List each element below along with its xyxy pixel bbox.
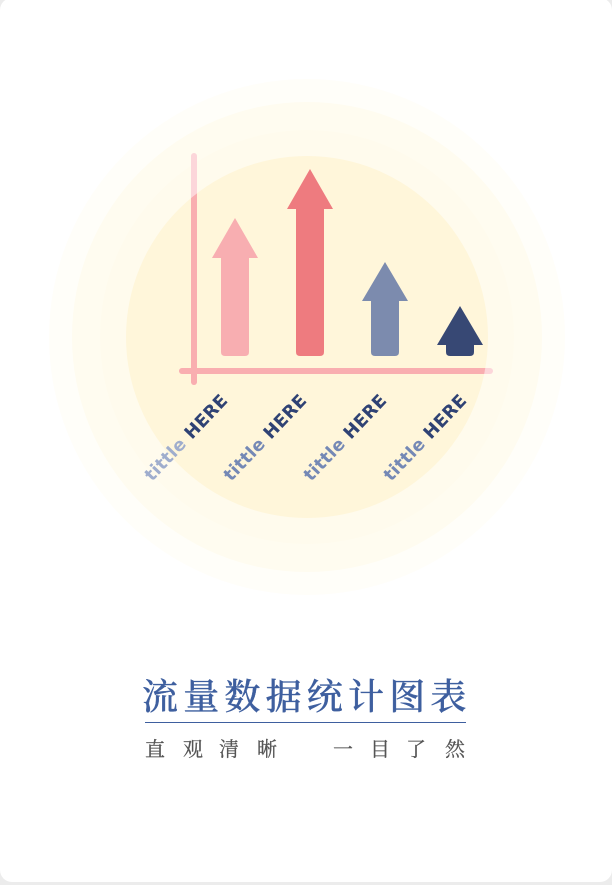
label 2: tittle HERE bbox=[220, 391, 311, 485]
arrow bar 4 bbox=[437, 306, 483, 356]
label 4: tittle HERE bbox=[380, 391, 471, 485]
bar chart bbox=[141, 153, 493, 485]
title underline bbox=[145, 722, 466, 723]
x axis bbox=[179, 368, 493, 374]
subtitle: 直观清晰 bbox=[145, 738, 277, 761]
background glow circles bbox=[49, 79, 565, 595]
main title: 流量数据统计图表 bbox=[142, 677, 472, 717]
label 3: tittle HERE bbox=[300, 391, 391, 485]
arrow bar 1 bbox=[212, 218, 258, 356]
label 1: tittle HERE bbox=[141, 391, 232, 485]
arrow bar 3 bbox=[362, 262, 408, 356]
subtitle continued: 一目了然 bbox=[333, 738, 466, 761]
arrow bar 2 bbox=[287, 169, 333, 356]
y axis bbox=[191, 153, 197, 385]
